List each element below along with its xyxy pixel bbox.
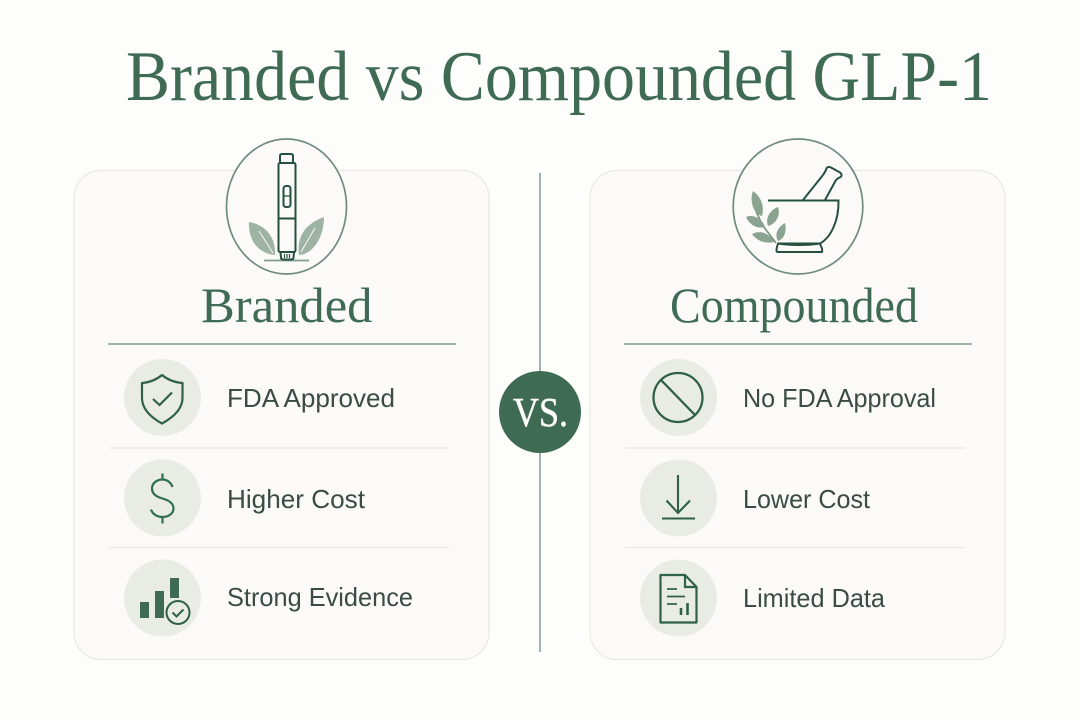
row: FDA Approved: FDA Approved [227, 383, 395, 413]
row: No FDA Approval: No FDA Approval [743, 383, 936, 413]
row: Higher Cost [124, 460, 366, 536]
heading: Branded: Branded [201, 277, 372, 333]
row: Lower Cost: Lower Cost [743, 484, 871, 514]
row: Limited Data [640, 560, 886, 636]
row: No FDA Approval [640, 359, 936, 436]
panel: branded [74, 139, 489, 660]
heading: Compounded: Compounded [670, 277, 918, 333]
center divider line [539, 173, 541, 652]
icon: document with chart [640, 560, 717, 636]
VS badge [499, 371, 581, 453]
icon: down arrow to line [640, 460, 717, 536]
icon: prohibited sign [640, 359, 717, 436]
icon: shield check [124, 359, 201, 436]
row: FDA Approved [124, 359, 395, 436]
row: Strong Evidence: Strong Evidence [227, 582, 413, 612]
icon: dollar sign [124, 460, 201, 536]
row: Higher Cost: Higher Cost [227, 484, 366, 514]
icon: bar chart with check [124, 560, 201, 636]
row: Limited Data: Limited Data [743, 583, 886, 613]
row: Strong Evidence [124, 560, 413, 636]
title: Branded vs Compounded GLP-1 [126, 38, 992, 116]
panel: compounded [590, 139, 1005, 660]
icon: injector pen with leaves [226, 139, 346, 274]
icon: mortar and pestle with herb [733, 139, 863, 274]
row: Lower Cost [640, 460, 871, 536]
VS badge: VS. [513, 389, 568, 435]
